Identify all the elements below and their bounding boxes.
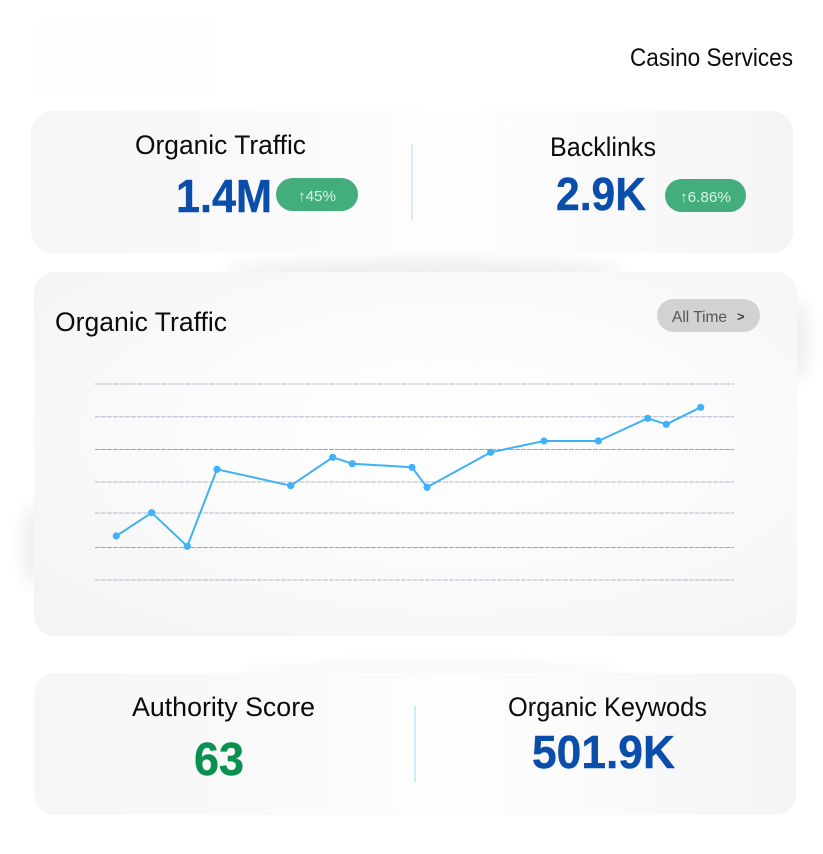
time filter button: > (737, 309, 745, 324)
divider (411, 144, 413, 220)
panel: organic traffic chart (34, 272, 797, 636)
metric: organic keywords label: Organic Keywods (508, 692, 707, 722)
badge: up 45%: ↑45% (298, 188, 336, 205)
metric: organic traffic value: 1.4M (176, 170, 272, 222)
heading: Casino Services: Casino Services (630, 44, 793, 72)
metric: backlinks label: Backlinks (550, 132, 656, 162)
panel: bottom metrics (34, 673, 796, 815)
faint logo area (38, 18, 216, 97)
metric: authority score label: Authority Score (132, 692, 315, 722)
panel: top metrics (31, 111, 793, 253)
line chart (95, 384, 734, 580)
chart heading: Organic Traffic (55, 307, 227, 337)
time filter button (657, 299, 760, 332)
metric: organic keywords value: 501.9K (532, 726, 675, 778)
badge: up 6.86%: ↑6.86% (680, 189, 731, 206)
badge: up 45% (276, 178, 358, 211)
badge: up 6.86% (665, 179, 746, 212)
time filter button: All Time (672, 309, 727, 326)
metric: backlinks value: 2.9K (556, 168, 646, 220)
metric: organic traffic label: Organic Traffic (135, 130, 306, 160)
metric: authority score value: 63 (194, 733, 244, 785)
divider (414, 706, 416, 782)
panel shadows (23, 259, 808, 681)
